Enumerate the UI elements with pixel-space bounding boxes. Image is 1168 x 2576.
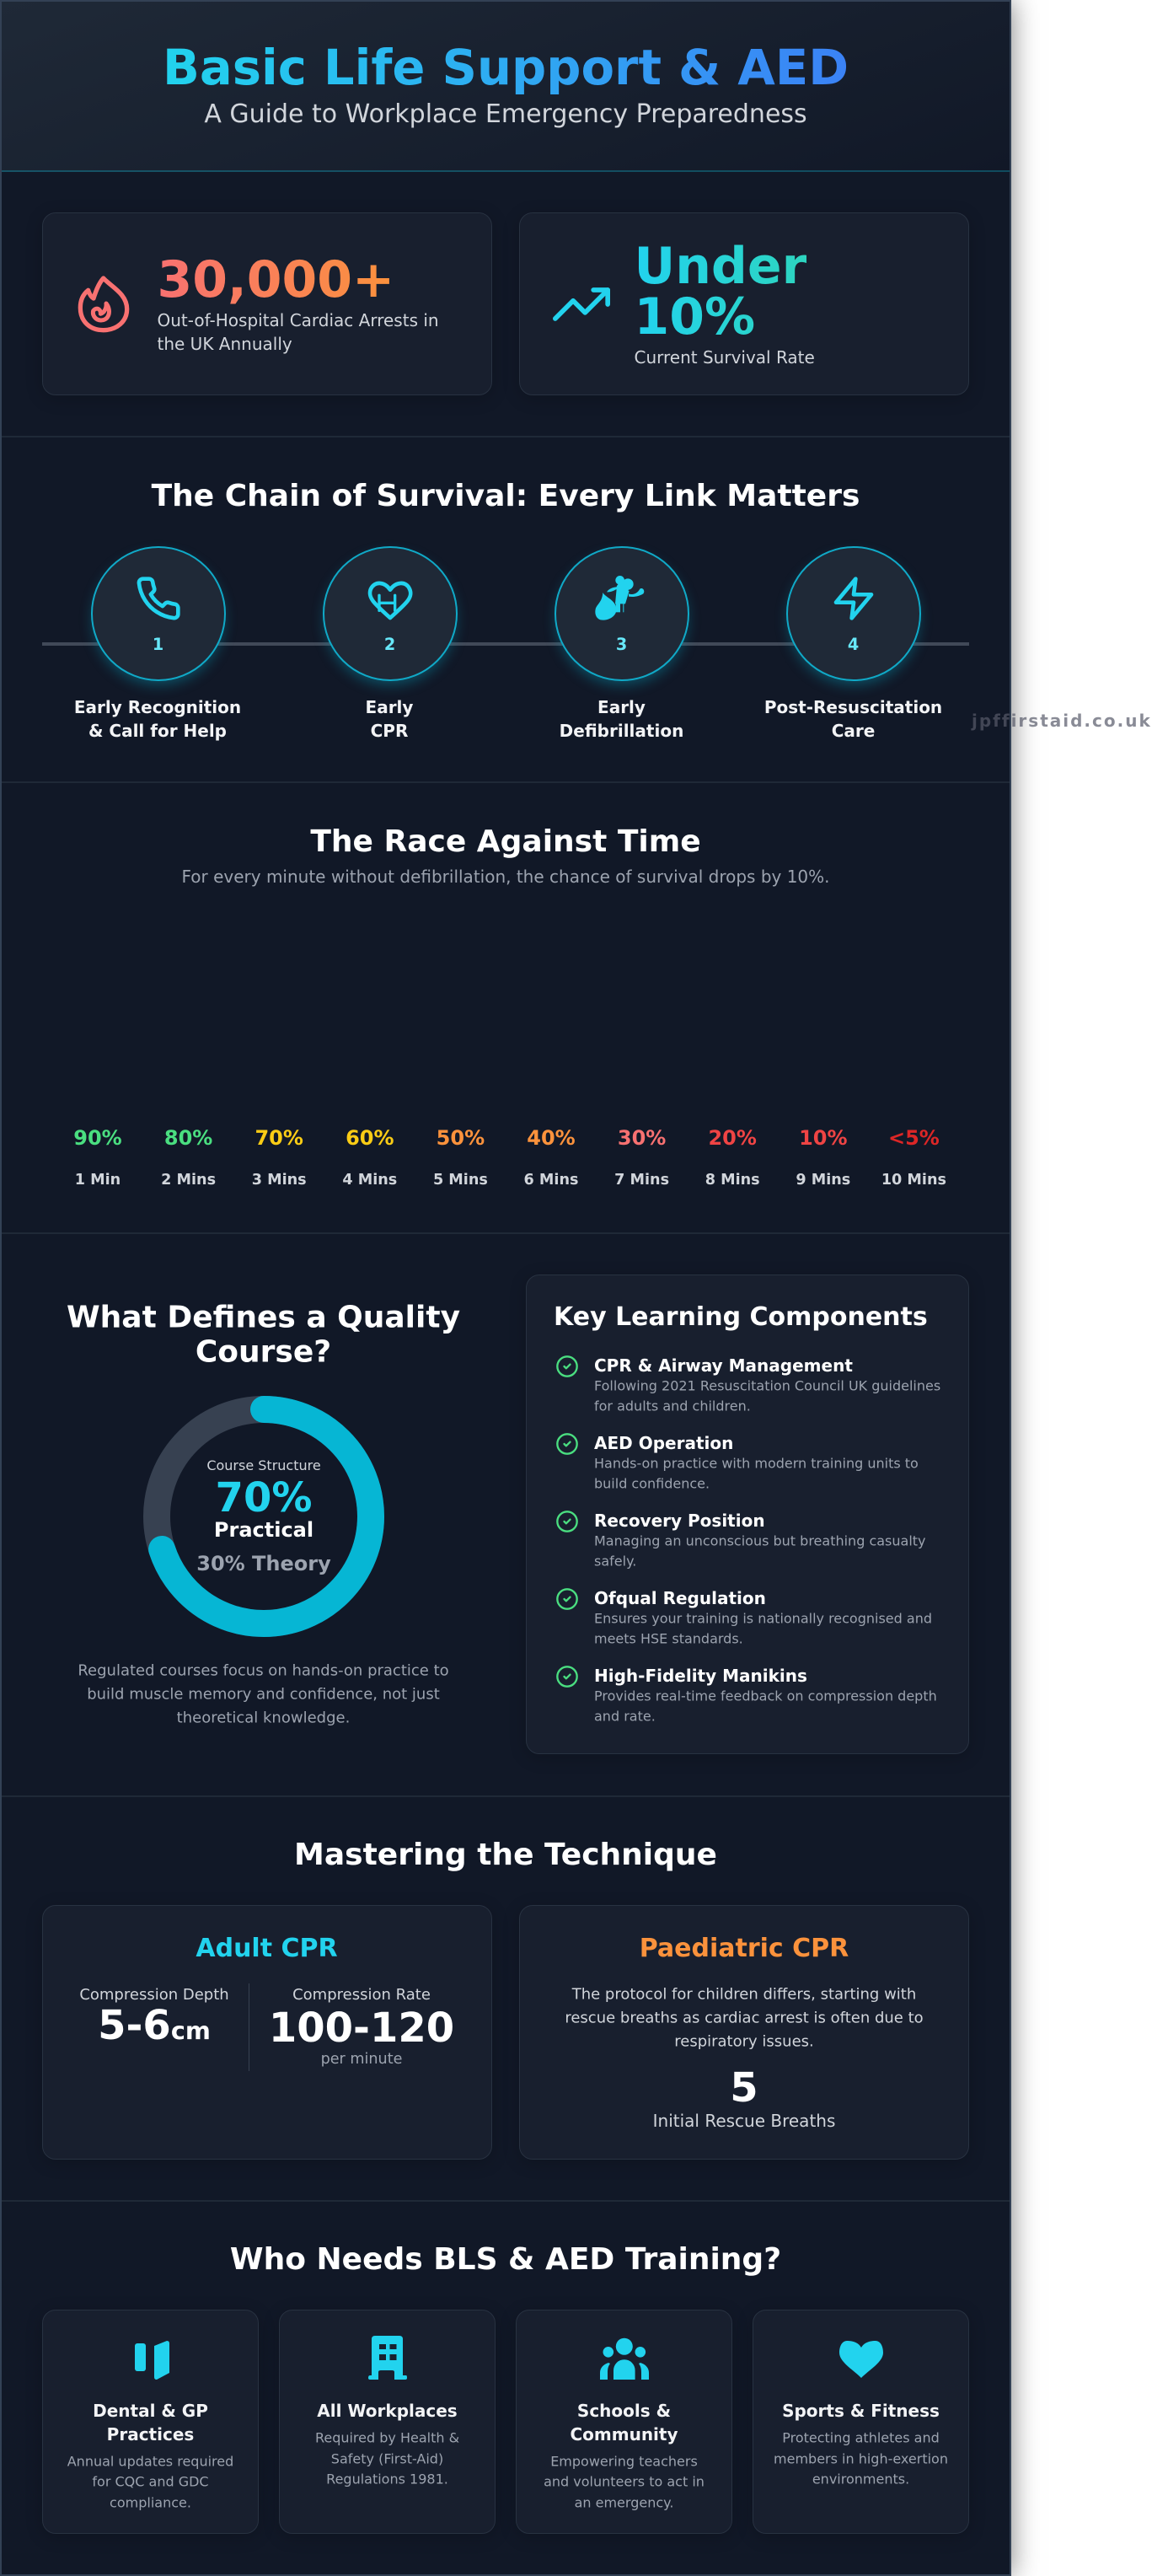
heading: chain of survival: The Chain of Survival: Every Link Matters: [152, 479, 860, 513]
paediatric description: [565, 1986, 924, 2051]
icon: defibrillation figure: [595, 576, 644, 620]
item 5 description: and rate.: [594, 1709, 656, 1725]
step label 2: Early: [366, 697, 413, 717]
stat number: 30,000+: 30,000+: [157, 250, 394, 309]
paediatric heading: Paediatric CPR: [640, 1934, 849, 1963]
4 min label: 4 Mins: [342, 1172, 397, 1189]
card title: [570, 2401, 678, 2445]
panel: cardiac arrest stat: [42, 212, 492, 395]
1 min value: 90%: [73, 1126, 122, 1150]
header band: [2, 2, 1010, 172]
stat description: the UK Annually: [157, 334, 292, 354]
item 3 description: Managing an unconscious but breathing casualty: [594, 1532, 926, 1549]
3 min value: 70%: [254, 1126, 303, 1150]
item 2 description: Hands-on practice with modern training units to: [594, 1455, 919, 1472]
card description: Empowering teachers: [550, 2454, 698, 2470]
heading: who needs training: Who Needs BLS & AED Training?: [230, 2242, 781, 2277]
quality paragraph: theoretical knowledge.: [177, 1709, 350, 1727]
paediatric description: respiratory issues.: [674, 2033, 814, 2051]
card title: All Workplaces: [317, 2401, 458, 2421]
10 min label: 10 Mins: [881, 1172, 946, 1189]
step label 3: Early: [597, 697, 646, 717]
chain step 3: [555, 546, 689, 681]
panel: all workplaces: [279, 2310, 496, 2534]
4 min value: 60%: [346, 1126, 394, 1150]
stat description: Out-of-Hospital Cardiac Arrests in: [157, 310, 439, 330]
8 min value: 20%: [708, 1126, 757, 1150]
icon: people: [600, 2338, 649, 2380]
rate label: Compression Rate: [292, 1986, 431, 2004]
item 5 description: [594, 1688, 937, 1725]
item 4 description: meets HSE standards.: [594, 1631, 743, 1647]
stat description: Current Survival Rate: [634, 347, 815, 368]
3 min label: 3 Mins: [252, 1172, 307, 1189]
step label 3: Defibrillation: [560, 721, 683, 741]
check icon 3: [556, 1511, 578, 1532]
check icon 4: [556, 1588, 578, 1610]
stat number: under 10%: Under: [634, 236, 806, 295]
item 2 description: build confidence.: [594, 1476, 710, 1492]
step label 2: CPR: [371, 721, 408, 741]
item 3 description: safely.: [594, 1554, 636, 1570]
10 min value: <5%: [888, 1126, 940, 1150]
2 min value: 80%: [164, 1126, 212, 1150]
step number 2: 2: [384, 635, 395, 654]
icon: phone: [137, 577, 180, 620]
7 min label: 7 Mins: [614, 1172, 669, 1189]
donut practical label: Practical: [214, 1518, 313, 1542]
rate value: 100-120: [269, 2004, 454, 2052]
item 1 description: [594, 1377, 940, 1414]
card title: Dental & GP: [93, 2401, 208, 2421]
item 5 description: Provides real-time feedback on compression depth: [594, 1688, 937, 1704]
card description: for CQC and GDC: [92, 2474, 209, 2490]
stat number: under 10%: 10%: [634, 287, 755, 346]
heading: race against time: The Race Against Time: [310, 824, 701, 858]
connector line: [42, 642, 969, 646]
item 3 description: [594, 1532, 926, 1570]
rate unit: per minute: [321, 2051, 402, 2068]
card description: compliance.: [110, 2494, 191, 2510]
card description: members in high-exertion: [774, 2450, 948, 2466]
step label 4: Post-Resuscitation: [764, 697, 942, 717]
quality paragraph: build muscle memory and confidence, not just: [87, 1686, 440, 1704]
donut theory label: 30% Theory: [196, 1551, 331, 1575]
icon: flame: [78, 276, 130, 332]
step label 1: [74, 697, 241, 741]
panel: dental and GP: [42, 2310, 259, 2534]
9 min value: 10%: [799, 1126, 848, 1150]
stat number: under 10%: [634, 241, 806, 342]
chain step 4: [785, 546, 920, 681]
9 min label: 9 Mins: [796, 1172, 850, 1189]
step label 4: [764, 697, 942, 741]
card description: Regulations 1981.: [326, 2471, 448, 2487]
8 min label: 8 Mins: [705, 1172, 760, 1189]
step label 4: Care: [832, 721, 875, 741]
item 1 description: for adults and children.: [594, 1398, 751, 1414]
card description: Required by Health &: [315, 2430, 459, 2446]
quality paragraph: [78, 1662, 449, 1727]
icon: heart with compressions: [367, 582, 413, 620]
rescue breath label: Initial Rescue Breaths: [653, 2111, 835, 2131]
step number 3: 3: [616, 635, 627, 654]
step label 2: [366, 697, 413, 741]
check icon 2: [556, 1433, 578, 1455]
card description: Safety (First-Aid): [331, 2450, 443, 2466]
heading: quality course: [67, 1300, 460, 1369]
key learning heading: Key Learning Components: [554, 1302, 928, 1332]
icon: dental: [135, 2341, 169, 2380]
card description: [544, 2454, 705, 2510]
depth label: Compression Depth: [79, 1986, 229, 2004]
card title: Practices: [107, 2424, 194, 2445]
check icon 1: [556, 1355, 578, 1377]
depth value: 5-6cm: [98, 2002, 211, 2049]
2 min label: 2 Mins: [161, 1172, 216, 1189]
step number 4: 4: [848, 635, 859, 654]
card description: an emergency.: [575, 2494, 673, 2510]
icon: bolt: [834, 577, 873, 620]
item 2 title: AED Operation: [594, 1433, 733, 1453]
5 min value: 50%: [437, 1126, 485, 1150]
heading: quality course: Course?: [196, 1334, 331, 1369]
card title: Sports & Fitness: [782, 2401, 940, 2421]
paediatric description: The protocol for children differs, starting with: [572, 1986, 916, 2004]
card title: Schools &: [577, 2401, 671, 2421]
card title: Community: [570, 2424, 678, 2445]
item 2 description: [594, 1455, 919, 1492]
item 4 description: Ensures your training is nationally recognised and: [594, 1610, 932, 1627]
watermark: jpffirstaid.co.uk: [972, 711, 1152, 731]
check icon 5: [556, 1666, 578, 1688]
donut label: Course Structure: [206, 1457, 321, 1473]
item 5 title: High-Fidelity Manikins: [594, 1666, 807, 1686]
subheading: For every minute without defibrillation, the chance of survival drops by 10%.: [181, 867, 830, 887]
item 1 description: Following 2021 Resuscitation Council UK guidelines: [594, 1377, 940, 1394]
rescue breath number: 5: [730, 2064, 758, 2112]
icon: building: [368, 2336, 407, 2380]
icon: trending up: [553, 287, 610, 321]
heading: mastering the technique: Mastering the Technique: [294, 1838, 717, 1872]
item 4 title: Ofqual Regulation: [594, 1588, 766, 1608]
title: Basic Life Support & AED: [163, 40, 849, 96]
panel: adult CPR: [42, 1905, 492, 2160]
donut chart: 70% practical, 30% theory: [143, 1396, 384, 1637]
panel: schools and community: [516, 2310, 732, 2534]
subtitle: A Guide to Workplace Emergency Preparedness: [204, 99, 807, 129]
panel: paediatric CPR: [519, 1905, 969, 2160]
timeline: survival by minute: [73, 1126, 946, 1189]
card title: [93, 2401, 208, 2445]
item 3 title: Recovery Position: [594, 1511, 765, 1531]
6 min value: 40%: [527, 1126, 576, 1150]
6 min label: 6 Mins: [524, 1172, 578, 1189]
step label 1: Early Recognition: [74, 697, 241, 717]
7 min value: 30%: [618, 1126, 666, 1150]
paediatric description: rescue breaths as cardiac arrest is often due to: [565, 2010, 924, 2027]
card description: Annual updates required: [67, 2454, 233, 2470]
quality paragraph: Regulated courses focus on hands-on practice to: [78, 1662, 449, 1680]
stat description: [157, 310, 439, 354]
card description: and volunteers to act in: [544, 2474, 705, 2490]
card description: [315, 2430, 459, 2487]
1 min label: 1 Min: [75, 1172, 121, 1189]
5 min label: 5 Mins: [433, 1172, 488, 1189]
step label 1: & Call for Help: [88, 721, 227, 741]
panel: survival rate stat: [519, 212, 969, 395]
heading: quality course: What Defines a Quality: [67, 1300, 460, 1335]
panel: sports and fitness: [753, 2310, 969, 2534]
item 1 title: CPR & Airway Management: [594, 1355, 853, 1376]
panel: key learning components: [526, 1275, 969, 1754]
item 4 description: [594, 1610, 932, 1647]
card description: [67, 2454, 233, 2510]
card description: Protecting athletes and: [782, 2430, 940, 2446]
donut value: 70%: [216, 1474, 312, 1521]
step label 3: [560, 697, 683, 741]
chain step 2: [322, 546, 457, 681]
card description: [774, 2430, 948, 2487]
adult CPR heading: Adult CPR: [196, 1934, 338, 1963]
card description: environments.: [812, 2471, 909, 2487]
icon: heart: [839, 2341, 883, 2378]
step number 1: 1: [153, 635, 163, 654]
chain step 1: [91, 546, 226, 681]
